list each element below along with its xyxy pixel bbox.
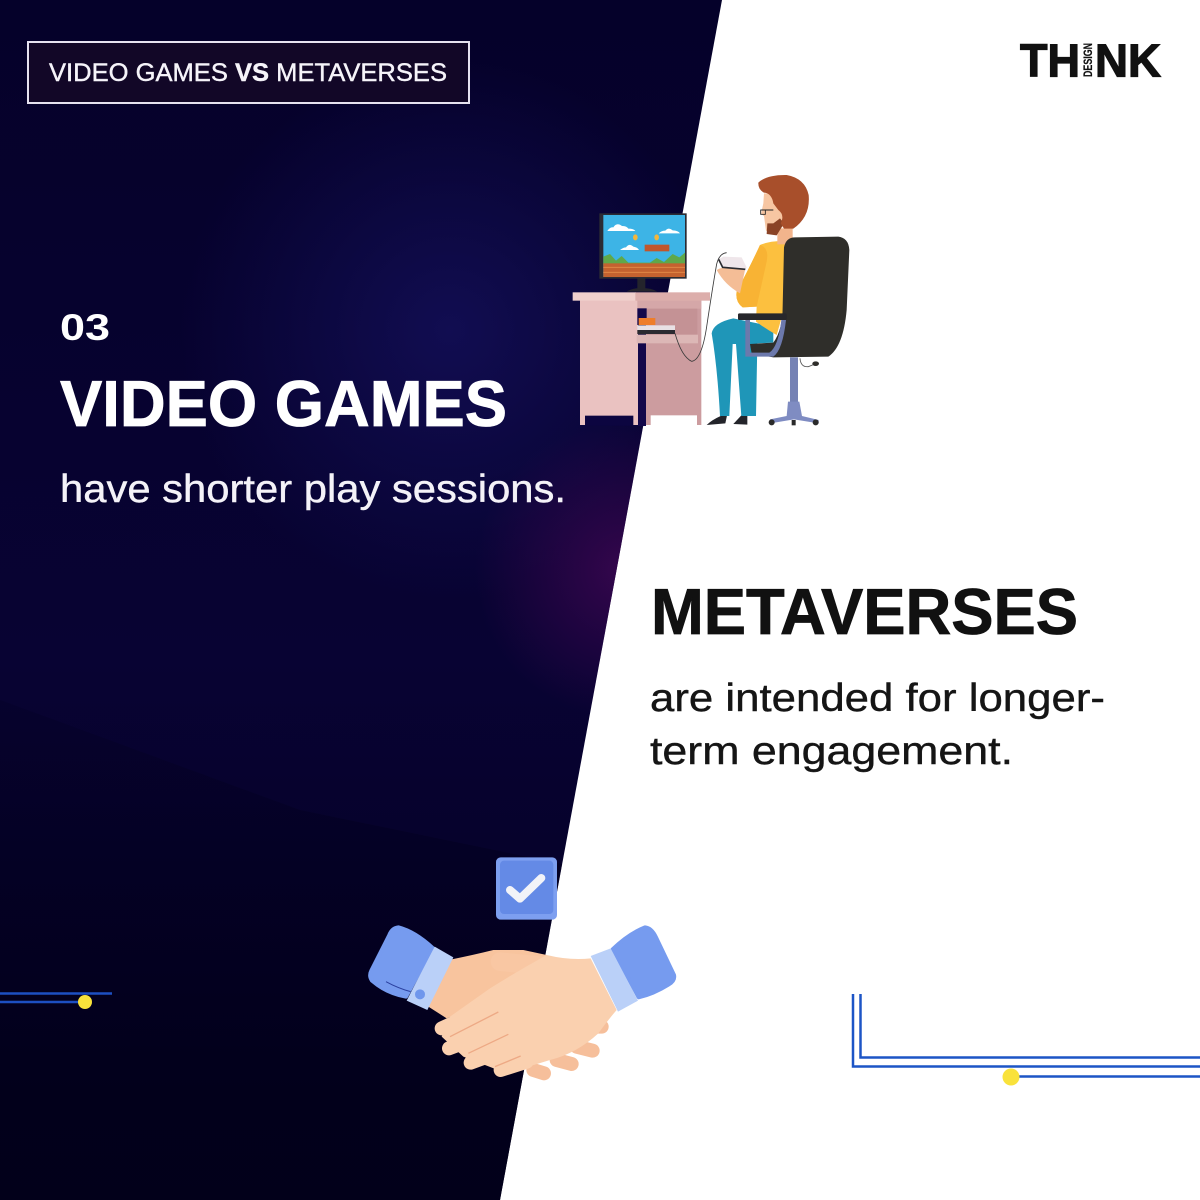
desk bbox=[573, 292, 710, 426]
logo: think design: NK bbox=[1095, 34, 1161, 86]
monitor bbox=[599, 213, 687, 292]
section number: 03 bbox=[60, 307, 110, 348]
illustration: handshake with check badge bbox=[370, 857, 674, 1073]
text: metaverses description: are intended for longer- bbox=[650, 677, 1105, 720]
right hand bbox=[442, 955, 617, 1073]
text: metaverses description bbox=[650, 677, 1105, 773]
panel: video games dark background bbox=[0, 0, 722, 1200]
controller cable bbox=[675, 253, 727, 361]
office chair bbox=[738, 237, 849, 357]
right cuff bbox=[591, 927, 674, 1012]
header label box bbox=[28, 42, 469, 103]
heading: video games: VIDEO GAMES bbox=[60, 367, 507, 440]
left forearm and thumb bbox=[428, 950, 547, 1018]
logo: think design bbox=[1020, 34, 1161, 86]
chair base and pole bbox=[769, 357, 819, 425]
illustration: man playing video game at desk bbox=[573, 175, 849, 426]
header label box: VIDEO GAMES VS METAVERSES bbox=[49, 59, 447, 87]
text: video games description: have shorter play sessions. bbox=[60, 468, 566, 511]
text: metaverses description: term engagement. bbox=[650, 730, 1013, 773]
logo: think design: TH bbox=[1020, 34, 1080, 86]
logo: think design: DESIGN bbox=[1083, 43, 1095, 77]
decorative connector: right bbox=[853, 994, 1200, 1086]
icon: check badge bbox=[496, 857, 557, 920]
right hand back fingers bbox=[533, 1027, 602, 1073]
person bbox=[707, 175, 809, 425]
decorative connector: left bbox=[0, 994, 112, 1009]
heading: metaverses: METAVERSES bbox=[651, 575, 1078, 648]
left cuff bbox=[370, 927, 453, 1010]
